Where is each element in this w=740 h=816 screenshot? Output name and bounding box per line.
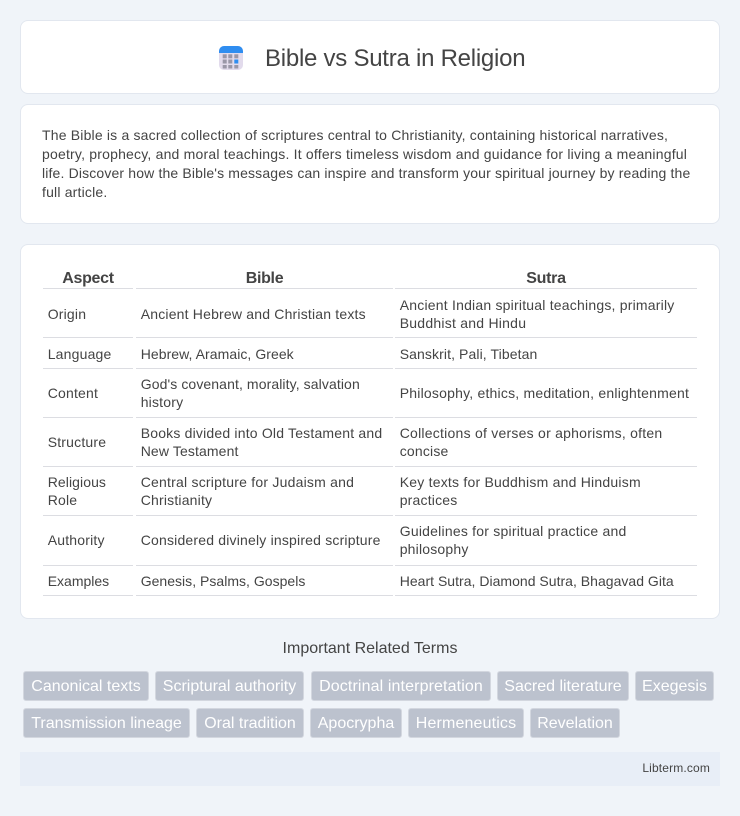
footer credit: Libterm.com bbox=[642, 761, 710, 775]
row: Examples bbox=[48, 573, 674, 589]
tag bbox=[196, 708, 304, 738]
tag: Hermeneutics bbox=[416, 715, 516, 732]
tag: Exegesis bbox=[642, 678, 707, 695]
row: Religious Role: Religious bbox=[48, 474, 106, 490]
row: Examples: Examples bbox=[48, 573, 109, 589]
row: Religious Role: Central scripture for Judaism and bbox=[141, 474, 354, 490]
row: Content: God's covenant, morality, salvation bbox=[141, 376, 360, 392]
icon: calendar bbox=[219, 46, 243, 70]
title: Bible vs Sutra in Religion bbox=[265, 45, 525, 72]
tags: related terms bbox=[23, 671, 714, 738]
row: Authority: Authority bbox=[48, 532, 105, 548]
row: Authority: philosophy bbox=[400, 541, 469, 557]
panel: header bbox=[20, 20, 720, 94]
tag bbox=[530, 708, 620, 738]
row: Examples: Genesis, Psalms, Gospels bbox=[141, 573, 305, 589]
row: Content: history bbox=[141, 394, 183, 410]
tag bbox=[635, 671, 714, 701]
row: Religious Role: Christianity bbox=[141, 492, 212, 508]
tag: Sacred literature bbox=[504, 678, 622, 695]
row: Authority: Guidelines for spiritual practice and bbox=[400, 523, 627, 539]
tag: Apocrypha bbox=[318, 715, 394, 732]
row: Religious Role bbox=[48, 474, 641, 508]
row: Authority bbox=[48, 523, 627, 557]
tag: Oral tradition bbox=[204, 715, 296, 732]
row: Language: Language bbox=[48, 346, 112, 362]
row: Origin: Ancient Indian spiritual teachings, primarily bbox=[400, 297, 675, 313]
header: Aspect: Aspect bbox=[62, 270, 114, 287]
row: Structure: Collections of verses or aphorisms, often bbox=[400, 425, 662, 441]
header: Bible: Bible bbox=[246, 270, 283, 287]
tag bbox=[497, 671, 629, 701]
footer bbox=[20, 752, 720, 786]
row: Religious Role: Key texts for Buddhism and Hinduism bbox=[400, 474, 641, 490]
row: Origin bbox=[48, 297, 675, 331]
text block: introduction: full article. bbox=[42, 184, 107, 200]
row: Language bbox=[48, 346, 537, 362]
row: Structure: concise bbox=[400, 443, 449, 459]
tag bbox=[155, 671, 304, 701]
row: Language: Sanskrit, Pali, Tibetan bbox=[400, 346, 537, 362]
tag bbox=[23, 671, 149, 701]
row: Authority: Considered divinely inspired scripture bbox=[141, 532, 381, 548]
row: Origin: Buddhist and Hindu bbox=[400, 315, 526, 331]
tag bbox=[310, 708, 402, 738]
panel: comparison table bbox=[20, 244, 720, 619]
row: Structure: Books divided into Old Testament and bbox=[141, 425, 382, 441]
text block: introduction: life. Discover how the Bible's messages can inspire and transform your spiritual journey by reading the bbox=[42, 165, 690, 181]
tag: Transmission lineage bbox=[31, 715, 182, 732]
heading: related terms: Important Related Terms bbox=[283, 640, 457, 657]
tag: Revelation bbox=[537, 715, 613, 732]
tag bbox=[408, 708, 524, 738]
row: Religious Role: Role bbox=[48, 492, 77, 508]
text block: introduction: poetry, prophecy, and moral teachings. It offers timeless wisdom and guidance for living a meaningful bbox=[42, 146, 687, 162]
comparison table bbox=[43, 270, 697, 596]
tag bbox=[311, 671, 491, 701]
row: Origin: Origin bbox=[48, 306, 86, 322]
text block: introduction bbox=[42, 127, 690, 200]
tag: Doctrinal interpretation bbox=[319, 678, 483, 695]
row: Structure bbox=[48, 425, 662, 459]
panel: introduction bbox=[20, 104, 720, 224]
row: Origin: Ancient Hebrew and Christian texts bbox=[141, 306, 366, 322]
row: Structure: Structure bbox=[48, 434, 106, 450]
row: Content bbox=[48, 376, 689, 410]
tag bbox=[23, 708, 190, 738]
row: Structure: New Testament bbox=[141, 443, 238, 459]
tag: Canonical texts bbox=[31, 678, 141, 695]
row: Language: Hebrew, Aramaic, Greek bbox=[141, 346, 294, 362]
row: Content: Content bbox=[48, 385, 98, 401]
row: Examples: Heart Sutra, Diamond Sutra, Bhagavad Gita bbox=[400, 573, 674, 589]
row: Content: Philosophy, ethics, meditation, enlightenment bbox=[400, 385, 689, 401]
tag: Scriptural authority bbox=[163, 678, 296, 695]
header: Sutra: Sutra bbox=[526, 270, 566, 287]
text block: introduction: The Bible is a sacred collection of scriptures central to Christianity, containing historical narratives, bbox=[42, 127, 668, 143]
row: Religious Role: practices bbox=[400, 492, 457, 508]
